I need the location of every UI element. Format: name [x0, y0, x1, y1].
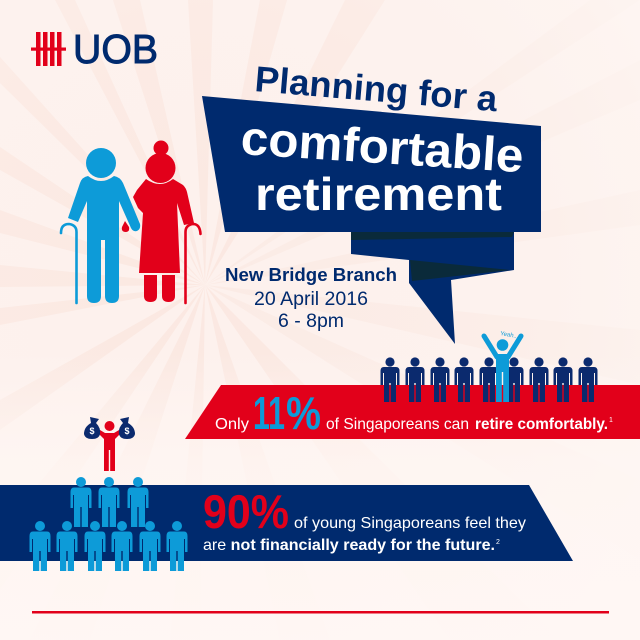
- branch name: New Bridge Branch: [225, 265, 397, 285]
- icon: elderly woman with cane: [122, 140, 200, 303]
- logo wordmark: UOB: [73, 26, 158, 72]
- cheering figure: [484, 336, 521, 402]
- red statistic band: 1: [609, 417, 613, 424]
- statistic text: 90%: 90%: [203, 485, 289, 538]
- people pyramid: [30, 477, 188, 571]
- icon: money bag right: [119, 417, 135, 439]
- time: 6 - 8pm: [278, 311, 344, 332]
- event details: [225, 265, 397, 332]
- navy statistic band: 2: [496, 539, 500, 546]
- banner heading: retirement: retirement: [255, 168, 502, 220]
- logo mark: [31, 32, 66, 66]
- title: Planning for a: Planning for a: [253, 58, 500, 119]
- footer rule: [32, 611, 609, 614]
- navy statistic band: [0, 485, 573, 561]
- yeah label: Yeah...: [500, 331, 519, 340]
- red statistic band: of Singaporeans can: [326, 416, 469, 433]
- red figure with money bags: [84, 417, 135, 471]
- icon: elderly man with cane: [61, 148, 140, 303]
- red statistic band: [185, 385, 640, 439]
- navy statistic band: of young Singaporeans feel they: [294, 515, 526, 532]
- red statistic band: %: [286, 387, 321, 439]
- people row with cheering figure: [380, 331, 598, 402]
- UOB logo: [31, 26, 158, 72]
- navy statistic band: are not financially ready for the future.: [203, 537, 495, 554]
- icon: money bag left: [84, 417, 100, 439]
- red statistic band: retire comfortably.: [475, 416, 608, 433]
- speech banner: [202, 96, 541, 344]
- date: 20 April 2016: [254, 289, 368, 310]
- red statistic band: 11: [253, 387, 285, 439]
- red figure with money bags: $: [89, 426, 95, 436]
- red figure with money bags: $: [124, 426, 130, 436]
- statistic text: 11%: Only: [215, 416, 249, 433]
- banner heading: comfortable: comfortable: [239, 112, 525, 183]
